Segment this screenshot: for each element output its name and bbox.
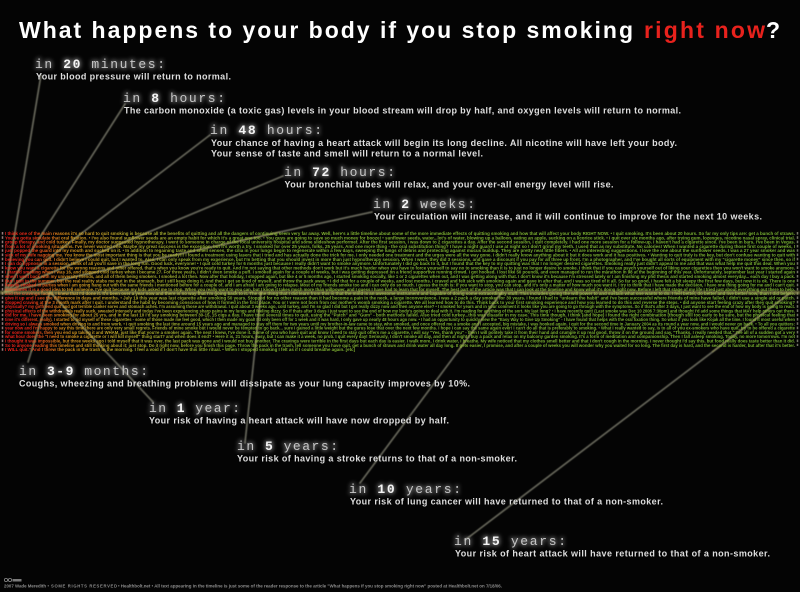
- reader responses text block: from a lot of smoking situations. I've never wanted one. Maybe my great success is the exception, but it's worth a try. I smoked for over 25 years, folks. 25 years. And one more thing - the oral substitution thing? I have a night guard I use at night so I don't grind my teeth. I used that as my substitute. No calories! When I wanted a cigarette during those first couple of weeks, I: [5, 244, 795, 249]
- step: in 3-9 months: Coughs, wheezing and breathing problems will dissipate as your lung capacity improves by 10%.: [19, 378, 470, 388]
- reader responses text block: You've gotta simulate that oral fixation. • I've also found sunflower seeds are an empty habit for which it's a great one too. • You guys are going to save so much money for booze! • sunflower seeds, water...lot's of water, blowing up a balloon, eating an apple, sucking on a licorice stick. • I quit over six months ago, after trying gum, lozenges, nicotine nasal spray, clinical trial.: [5, 235, 795, 240]
- step: in 5 years: in 5 years:: [237, 439, 338, 454]
- step: in 72 hours: Your bronchial tubes will relax, and your over-all energy level will rise.: [284, 179, 614, 189]
- step: in 72 hours: in 72 hours:: [284, 165, 395, 180]
- step: in 2 weeks: [373, 197, 762, 222]
- step: in 48 hours: [210, 123, 677, 158]
- step: in 20 minutes: Your blood pressure will return to normal.: [36, 72, 231, 82]
- title: What happens to your body if you stop smoking: [19, 17, 633, 43]
- reader responses text block: year now and I'm happy to say this time there are only very small regrets. Friends of mine smoke but I would never be tempted to go back... sure I gained a little weight but the gurus lose that over the next few months. I hope I can say the same again ever! I can't do all that is preferably to smoking. • What I really wanted to say, is to all of you ex-smokers who have quit, try to be offered a cigarette: [5, 326, 796, 331]
- connector lines over text block: [5, 232, 790, 352]
- step: in 20 minutes: in 20 minutes:: [35, 57, 165, 72]
- reader responses text block: [4, 231, 796, 352]
- horizontal timeline band: [0, 291, 800, 294]
- reader responses text block: group therapy, and cold turkey. Finally, my doctor suggested hypnotherapy. I went to someone in charge of the local university hospital and some slideshow performer. After the first session, I was down to 2 cigarettes a day. After the second session, I quit completely. I had one more session for a follow-up. I haven't had a cigarette since. I've been in bars, I've been in Vegas.: [5, 240, 795, 245]
- step: in 1 year: [149, 401, 449, 426]
- step: in 2 weeks: Your circulation will increase, and it will continue to improve for the next 10 weeks.: [374, 212, 762, 222]
- step: in 10 years: [349, 482, 663, 506]
- timeline edge markers: [2, 232, 798, 352]
- step: in 48 hours: Your chance of having a heart attack will begin its long decline. All nicotine will have left your body.: [211, 138, 677, 148]
- step: in 72 hours: [284, 165, 614, 189]
- reader responses text block: I can do hypnosis in a session, think of all you'll save in the long run. Good luck, everyone! • I quit cold turkey for 6 months just because I really didn't want to smoke anymore. Unfortunately I did go back to it, but I found that the key to my quitting was that I no longer desired cigarettes. Smoking really just didn't appeal to me and that was what help me quit this deal. When you: [5, 261, 795, 266]
- reader responses text block: I thought it was impossible, but three weeks ago I told myself that it was over, the last pack was gone and I would not buy another. The cravings were terrible in the first days but each day is easier. I walk more, I drink water, I breathe. My wife noticed that my clothes smell better and that I don't cough in the morning. I never thought I'd say this, but food really does taste better than it did.: [5, 338, 795, 344]
- step: in 8 hours: The carbon monoxide (a toxic gas) levels in your blood stream will drop by half, and oxygen levels will return to normal.: [124, 106, 681, 116]
- reader responses text block: I started smoking when I was 16, and stopped cold turkey when I became 27. For three years, I didn't even smoke a puff. I smoked again for a couple of weeks, but I was getting depressed on a friend supportive running crowd. I got hooked. I lost like 50 pounds, and even managed to run the marathon in 98 at the beginning of this year. Unfortunately, september last year I started again: [5, 270, 795, 275]
- reader responses text block: driving so I always smoked when driving to and from work. • I quit smoking the last time around 15 years ago and managed to stay off them for two years until my brother-in-law came to stay, who smoked, and once offered me a smoke and I accepted, big mistake, I was hooked again. I quit for the second time in January 2004 as its round a year now, and I would never go back. • To all you quitters:: [5, 321, 796, 326]
- reader responses text block: But I quit in the summer, but the real reality stabs me out in the stomach, but I still keep doing it. And then I get so tired of myself, and throw the pack away. • I did that for a couple of weeks, and lost months. I craved and felt sick with smoking again and gave in after that, and I was so tired of it all. So far so good, I have felt a bit sleepy the first few days, but now it is ok. There is one: [5, 278, 796, 283]
- step: in 10 years: Your risk of lung cancer will have returned to that of a non-smoker.: [350, 496, 663, 506]
- step: in 8 hours: [123, 91, 681, 116]
- step: in 2 weeks: in 2 weeks:: [373, 197, 475, 212]
- step: in 20 minutes: [35, 57, 231, 82]
- reader responses text block: what hour does the "I need to smoke a cigarette or I will kill myself" thing start? and when does it end? • Here it is, 21 hours, easy, but I can make it a week, no prob. I quit every day! Seriously, I don't smoke all day, and then at night I buy a pack and relax on my balcony garden smoking. It's a form of meditation and companionship. Then I fall asleep smoking. Today, no more tomorrows. I'm not: [4, 334, 796, 339]
- reader responses text block: did for me, I have been smoking for about 25 yrs, and in the last 10 I'd say smoking between 30-15, 15 cigs a day. I have tried several times to quit, using the "Patch" and "Gum" - both methods failed. Also tried cold turkey...this was disaster in my case. This time though, I think (and hope) I found the right combination (though still too early to be sure, but the physical feeling that: [5, 313, 796, 318]
- reader responses text block: I WILL quit." And I threw the pack in the trash in the morning. I feel a void if I don't have this little ritual. • When I stopped smoking I felt as if I could breathe again. [etc]: [5, 347, 356, 352]
- step: in 8 hours: in 8 hours:: [123, 91, 225, 106]
- reader responses text block: I think one of the main reasons it's so hard to quit smoking is because all the benefits of quitting and all the dangers of continuing seem very far away. Well, here's a little timeline about some of the more immediate effects of quitting smoking and how that will affect your body RIGHT NOW. • I quit smoking. It's been about 20 hours. So far my only tips are: get a bunch of straws.: [5, 231, 795, 236]
- step: in 3-9 months: in 3-9 months:: [19, 364, 148, 379]
- step: in 15 years: in 15 years:: [454, 534, 566, 549]
- step: in 3-9 months: [19, 364, 470, 388]
- footer credits: •: [48, 584, 50, 588]
- title: right now: [644, 17, 765, 43]
- reader responses text block: believing you can quit. I didn't believe I could quit, but I wanted to. Also, I can only speak from my experience, but I'm betting that you should invest in more than just hypnotherapy session. When I went, they did 3 sessions, and gave a discount if you pay for all three up front. I'm a photographer, and I've bought all sorts of equipment with my "cigarette money" since then, so if: [5, 257, 796, 262]
- reader responses text block: So to anyone reading this timeline and still thinking about it: just stop. Do it right now, before you finish this page. Throw the pack in the trash, tell someone you have quit, get a bunch of straws and drink water all day long. It gets easier, I promise, and after a couple of weeks you will wonder why you waited for so long. The first day is hard, and the second is harder, but after that it's better.: [5, 343, 795, 348]
- step: in 5 years: Your risk of having a stroke returns to that of a non-smoker.: [237, 454, 517, 464]
- footer credits: SOME RIGHTS RESERVED: [51, 584, 117, 588]
- reader responses text block: just popped the guard into my mouth and sucked on it. • In addition to regaining taste and smell senses, the cilia in your lungs begin to regenerate within a few days, sweeping the lungs of debris and protecting against mucus buildup. They are pretty neat little fibers. • All are interesting suggestions. I love the one about the sunflower seeds. I was a 27 year smoker and was: [4, 248, 796, 253]
- step: in 15 years: Your risk of heart attack will have returned to that of a non-smoker.: [455, 548, 770, 558]
- title: ?: [766, 17, 780, 43]
- reader responses text block: give it up and I see the difference in days and months. • July 19 this year was last cigarette after smoking 50 years. Stopped for no other reason than it had become a pain in the neck, a large inconvenience. I was a 2 pack a day smoker for 30 years. I found I had to "unlearn the habit" and I've been successful where friends of mine have failed. I didn't use a single aid or patch.: [5, 296, 795, 300]
- reader responses text block: when I went back with my university friends, and all of them being smokers. I smoked a lot then. Now after that holiday, I stopped again, but like 4 or 5 months ago, I started smoking socially, like 1 or 2 cigarettes when out, and I was getting along with that. I don't know it's because I'm stressed lately or I am finishing my phd thesis and started smoking almost everyday... each day I buy a pack.: [4, 274, 795, 279]
- reader responses text block: sick of my wife nagging me. You know the most important thing is that you be ready!!! I found a treatment using lasers that I tried and has actually done the trick for me. I only needed one treatment and the urges were all the way gone. I didn't really know anything about it but it does work and it has positives. • Wanting to quit truly is the key, but don't confuse wanting to quit with: [5, 252, 795, 258]
- step: in 10 years: in 10 years:: [349, 482, 461, 497]
- reader responses text block: and the cravings faded. I knew that I'd done it. It's been over a year now and there is no way that I'm going back to it. The one thing that I did learn from this is that the mind is an awesome instrument and capable of doing some extraordinary stuff. This includes giving the will power to and sustain what one wants to do. I feel better, do better and live better now, than I did before.: [5, 291, 795, 296]
- reader responses text block: for some smokers, then you end up taking it and WHAM, just like that you're a smoker again. The next I knew, I've done it. Some of you who have quit and know I need to stay quit offers me a cigarette, I will say "Yes, thank you" - then I will politely take it from their hand and crumple it up real good, throw it on the ground and say, "Thanks, I really needed that." I've all of a sudden got a very: [5, 330, 796, 335]
- timeline connector lines: [5, 75, 790, 540]
- reader responses text block: sometimes it is a good idea to tell someone. I've quit because my kids asked me to stop. When you really want to you can, but I know it takes much more than willpower, and I guess I have had to learn that for myself. The best part of the article was that I can look at the timeline and know what it's doing right now. Before I left that stage of my life I tried just about everything out there to help.: [5, 287, 795, 292]
- footer credits: 2007 Wade Meredith: [4, 584, 46, 588]
- step: in 15 years: [454, 534, 770, 558]
- icon: creative commons badge: [4, 578, 22, 582]
- step: in 1 year: Your risk of having a heart attack will have now dropped by half.: [149, 416, 449, 426]
- step: in 5 years: [237, 439, 517, 464]
- step: in 48 hours: in 48 hours:: [210, 123, 322, 138]
- reader responses text block: heavily smoked at parties when I am going hang out with the same friends I mentioned before for a couple of, and I am afraid I am going to relapse. Most of my friends smoke too and I can only do so much. I guess the truth is: If you want to stop, you can stop, and it's only a matter of how much you want it. I try to think that I have made the decision, I have one thing going for me and I can't quit.: [5, 283, 795, 288]
- step: in 48 hours: Your sense of taste and smell will return to a normal level.: [211, 148, 483, 158]
- footer credits: • Healthbolt.net • All text appearing in the timeline is just some of the reader response to the article "What happens if you stop smoking right now" posted at Healthbolt.net on 7/18/06.: [118, 584, 502, 588]
- reader responses text block: stopped craving at the 3 month mark after I quit. I understand the habit by becoming conscious of how it formed in the first place. You or I were not born from our mother's womb smoking a cigarette. We all learned how to do this. Think back to your first smoking experience and how you learned to do this and reverse the steps. • did anyone start feeling crazy after they quit smoking?: [5, 300, 795, 305]
- reader responses text block: know you want a cigarette for the wrong reasons and other offered, that's when you know you're ready to quit. And I'm not saying that other methods don't work but it's much harder when you have to force yourself to say no to smoking than it is to just no longer desire to smoke. I think that if you can psych yourself out of liking your cigarettes then you won't want to smoke anymore.: [5, 265, 795, 270]
- step: in 1 year: in 1 year:: [149, 401, 240, 416]
